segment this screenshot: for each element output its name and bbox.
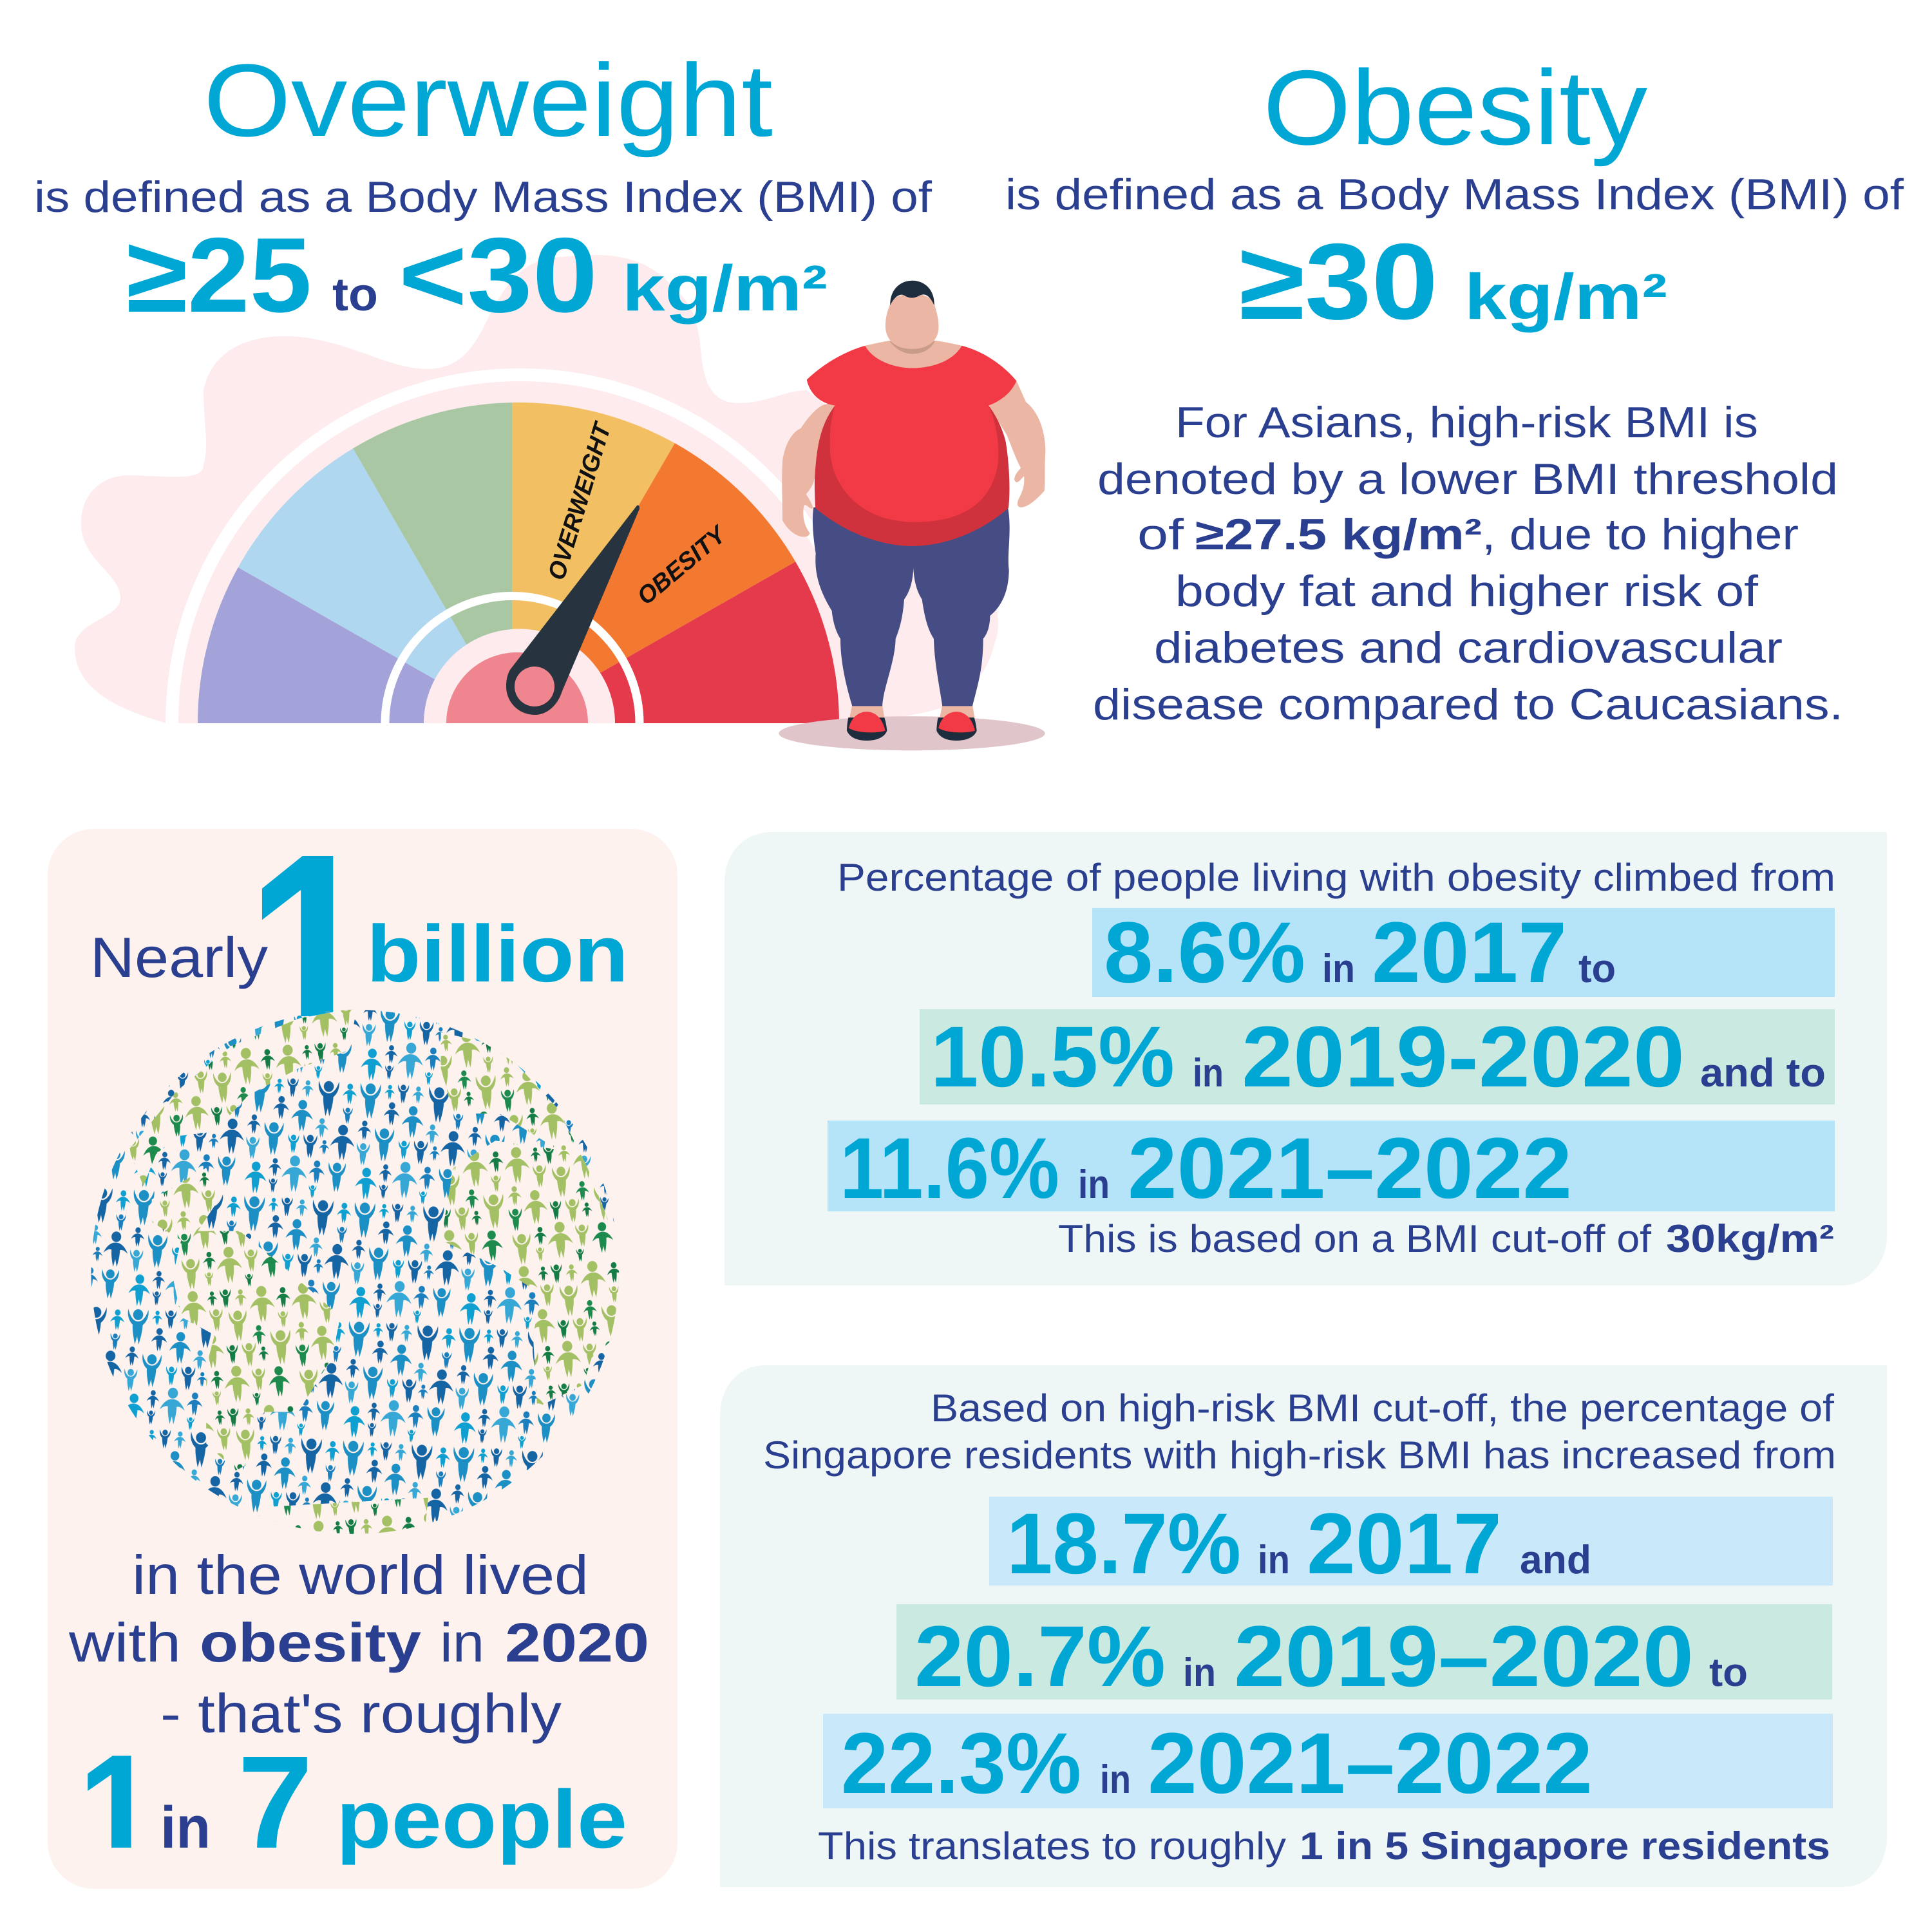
row: 2017: 8.6% — [1104, 905, 1305, 1001]
row: 2017 — [989, 1496, 1833, 1592]
row: 2017: 2017 — [1372, 905, 1567, 1001]
row: 2021-2022 — [828, 1121, 1835, 1217]
row: 2019-2020: 10.5% — [931, 1009, 1175, 1105]
text: in the world lived with obesity: obesity — [200, 1613, 421, 1674]
panel background — [48, 829, 677, 1889]
label: overweight: OVERWEIGHT — [543, 419, 617, 583]
value: overweight BMI range: to — [332, 269, 378, 321]
paragraph: Asian high-risk BMI: diabetes and cardiovascular — [1154, 623, 1783, 672]
row: 2021-2022: 2021–2022 — [1128, 1121, 1572, 1217]
paragraph: Asian high-risk BMI: of — [1137, 510, 1184, 559]
row: 2019-2020: 2019–2020 — [1234, 1609, 1694, 1705]
arms — [782, 381, 1045, 537]
stat: 1 in 7 people — [88, 1756, 625, 1865]
row: 2017 — [1092, 905, 1835, 1001]
head — [886, 294, 938, 349]
row: 2019-2020: in — [1193, 1051, 1224, 1095]
gauge needle — [506, 506, 639, 715]
row: 2021-2022: in — [1100, 1757, 1131, 1802]
value: overweight BMI range: kg/m² — [622, 252, 828, 325]
row: 2019-2020: and to — [1700, 1051, 1826, 1095]
paragraph: Asian high-risk BMI: ≥27.5 kg/m² — [1195, 510, 1482, 559]
row: 2019-2020: in — [1183, 1651, 1216, 1695]
panel background — [720, 1365, 1887, 1887]
heading: Nearly 1 billion: 1 — [246, 793, 377, 1118]
intro text: Based on high-risk BMI cut-off, the percentage of — [931, 1387, 1834, 1430]
neck — [865, 341, 961, 368]
paragraph: Asian high-risk BMI: disease compared to Caucasians. — [1093, 680, 1843, 729]
value: overweight BMI range: ≥25 — [126, 216, 312, 334]
gauge hub coral — [446, 652, 588, 723]
footnote: 1 in 5 Singapore residents — [1300, 1824, 1830, 1868]
globe made of people — [91, 1007, 623, 1539]
footnote: This is based on a BMI cut-off of — [1058, 1217, 1651, 1260]
intro text — [763, 1387, 1836, 1477]
heading: Nearly 1 billion — [90, 793, 629, 1118]
continents erase — [129, 1007, 623, 1539]
ground shadow — [779, 716, 1045, 750]
intro text: Percentage of people living with obesity climbed from — [837, 856, 1835, 899]
gauge coloured segments — [198, 402, 839, 723]
row: 2019-2020: to — [1709, 1651, 1748, 1695]
row: 2021-2022 — [823, 1714, 1833, 1812]
subtitle: obesity definition: is defined as a Body Mass Index (BMI) of — [1005, 170, 1904, 219]
row: 2017: 2017 — [1307, 1496, 1502, 1592]
value: obesity BMI threshold — [1239, 221, 1667, 342]
text: in the world lived with obesity: 2020 — [505, 1613, 649, 1674]
background blob behind gauge — [75, 255, 998, 723]
row: 2019-2020: 2019-2020 — [1242, 1009, 1685, 1105]
ankles — [849, 705, 975, 721]
stat: 1 in 7 people: 1 — [78, 1721, 158, 1900]
text: in the world lived with obesity: in the world lived — [132, 1545, 589, 1606]
row: 2019-2020 — [896, 1604, 1832, 1705]
gauge hub pink — [424, 629, 615, 723]
row: 2019-2020: 20.7% — [914, 1609, 1166, 1705]
text: in the world lived with obesity: - that's roughly — [160, 1683, 562, 1745]
hair — [890, 281, 934, 305]
stat: 1 in 7 people: 7 — [238, 1728, 313, 1876]
panel background — [724, 832, 1887, 1285]
stat: 1 in 7 people: people — [336, 1774, 627, 1866]
panel: global obesity prevalence — [724, 832, 1887, 1285]
text: in the world lived with obesity: with — [68, 1613, 181, 1674]
panel: Singapore high-risk BMI — [720, 1365, 1887, 1887]
row: 2021-2022: in — [1078, 1162, 1110, 1207]
man illustration — [779, 281, 1045, 750]
shirt — [807, 346, 1016, 522]
chin shadow — [890, 341, 935, 354]
heading: Nearly 1 billion: billion — [366, 909, 629, 999]
row: 2021-2022: 22.3% — [841, 1716, 1081, 1812]
value: obesity BMI threshold: kg/m² — [1464, 261, 1667, 333]
heading: Nearly 1 billion: Nearly — [90, 925, 268, 989]
intro text: Singapore residents with high-risk BMI has increased from — [763, 1434, 1836, 1477]
value: obesity BMI threshold: ≥30 — [1239, 221, 1438, 342]
paragraph: Asian high-risk BMI: For Asians, high-risk BMI is — [1175, 398, 1758, 447]
row: 2017: in — [1322, 947, 1355, 991]
gauge outer white ring — [172, 375, 869, 723]
paragraph: Asian high-risk BMI — [1093, 398, 1843, 729]
row: 2017: in — [1258, 1538, 1290, 1582]
footnote — [818, 1824, 1830, 1868]
paragraph: Asian high-risk BMI: denoted by a lower BMI threshold — [1097, 455, 1838, 504]
paragraph: Asian high-risk BMI: body fat and higher risk of — [1175, 567, 1758, 616]
value: overweight BMI range: <30 — [399, 216, 598, 334]
gauge chart — [166, 368, 839, 723]
text: in the world lived with obesity — [68, 1545, 649, 1745]
paragraph: Asian high-risk BMI: , due to higher — [1482, 510, 1799, 559]
row: 2017: to — [1578, 947, 1616, 991]
panel: nearly 1 billion — [48, 793, 677, 1900]
title: Overweight: Overweight — [204, 43, 773, 158]
stat: 1 in 7 people: in — [160, 1795, 211, 1861]
shirt shadow — [815, 406, 1009, 546]
title: Obesity: Obesity — [1263, 48, 1648, 167]
row: 2021-2022: 11.6% — [840, 1121, 1059, 1217]
footnote: 30kg/m² — [1666, 1217, 1834, 1260]
row: 2019-2020 — [920, 1009, 1835, 1105]
gauge inner white ring — [385, 596, 639, 723]
continent people — [129, 1007, 623, 1539]
row: 2021-2022: 2021–2022 — [1148, 1716, 1593, 1812]
heading: obesity — [1005, 48, 1904, 342]
value: overweight BMI range — [126, 216, 828, 334]
text: in the world lived with obesity: in — [440, 1613, 484, 1674]
subtitle: overweight definition: is defined as a Body Mass Index (BMI) of — [34, 173, 932, 222]
heading: overweight — [34, 43, 932, 334]
trousers — [813, 507, 1010, 706]
row: 2017: 18.7% — [1007, 1496, 1241, 1592]
row: 2017: and — [1520, 1538, 1591, 1582]
footnote: This translates to roughly — [818, 1824, 1286, 1868]
label: obesity: OBESITY — [632, 520, 733, 611]
ocean people — [91, 1010, 619, 1534]
shoes — [847, 712, 977, 741]
